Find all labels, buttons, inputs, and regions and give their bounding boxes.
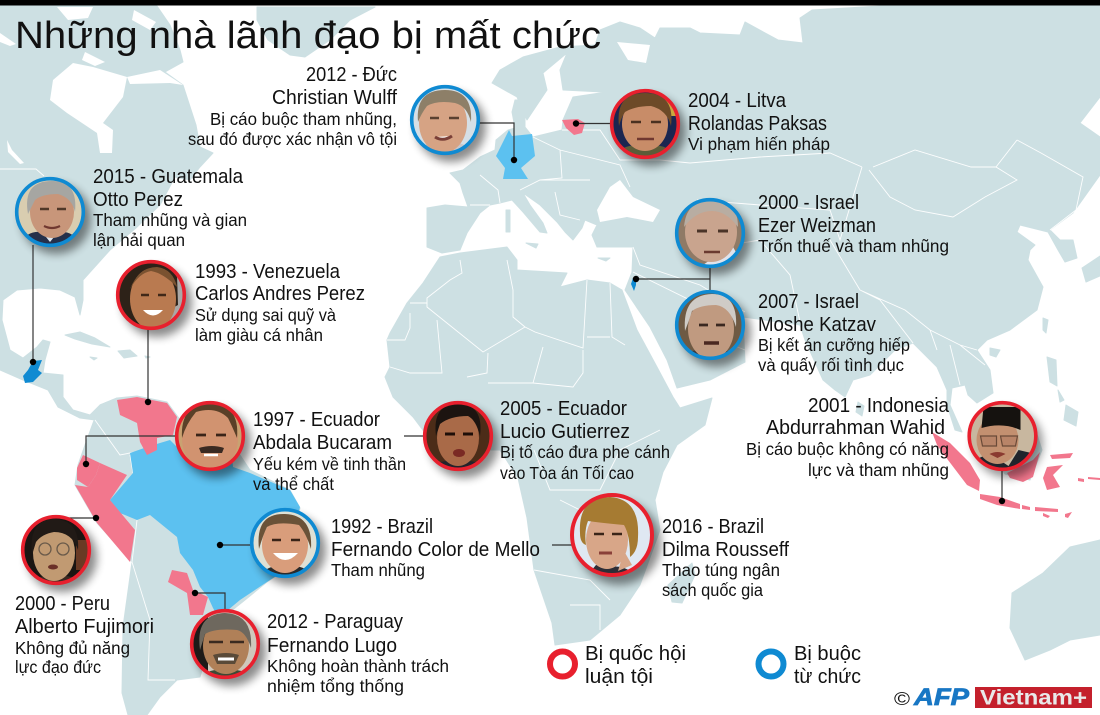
portrait xyxy=(175,401,251,478)
text: Katzav: Bị kết án cưỡng hiếp xyxy=(758,335,910,355)
connector xyxy=(573,120,612,127)
water: Arctic channels xyxy=(0,7,183,164)
profile text: Tham nhũng xyxy=(331,560,425,580)
text: Weizman: Trốn thuế và tham nhũng xyxy=(758,236,949,256)
land: Africa xyxy=(385,247,712,645)
land: Madagascar xyxy=(668,563,695,603)
text: Katzav: và quấy rối tình dục xyxy=(758,355,904,375)
profile text xyxy=(93,165,247,250)
text: Weizman: Ezer Weizman xyxy=(758,214,876,237)
portrait xyxy=(250,508,326,585)
country: Venezuela xyxy=(117,397,177,455)
profile text: 2005 - Ecuador xyxy=(500,397,627,420)
land: Mediterranean islands xyxy=(506,210,610,261)
profile: Abdurrahman Wahid xyxy=(746,394,1043,504)
profile text: 2012 - Paraguay xyxy=(267,610,404,633)
profile: Dilma Rousseff xyxy=(552,493,789,600)
profile text xyxy=(746,394,950,480)
connector xyxy=(145,327,151,405)
legend: forced to resign: Bị buộc xyxy=(794,642,861,665)
profile text: Abdurrahman Wahid xyxy=(766,416,945,439)
profile text: Không hoàn thành trách xyxy=(267,656,449,676)
connector xyxy=(404,435,425,437)
text: Weizman: 2000 - Israel xyxy=(758,191,859,214)
portrait xyxy=(190,609,266,686)
profile text: Bị cáo buộc tham nhũng, xyxy=(210,109,397,129)
profile text: 2015 - Guatemala xyxy=(93,165,244,188)
text: Katzav: 2007 - Israel xyxy=(758,290,859,313)
land: Australia xyxy=(1010,540,1100,660)
country: Israel xyxy=(631,278,636,291)
profile text: Không đủ năng xyxy=(15,638,130,658)
text: Katzav xyxy=(758,290,910,375)
legend: forced to resign: từ chức xyxy=(794,665,861,688)
AFP logo: AFP xyxy=(913,684,970,711)
water: Hudson Bay xyxy=(50,63,127,153)
profile text: Tham nhũng và gian xyxy=(93,210,247,230)
country: Ecuador xyxy=(77,455,100,487)
profile text: 2012 - Đức xyxy=(306,63,397,86)
legend: impeached: Bị quốc hội xyxy=(585,642,686,665)
profile text: và thể chất xyxy=(253,474,334,494)
profile text xyxy=(500,397,670,483)
profile: Ezer Weizman and Moshe Katzav xyxy=(633,191,949,375)
connector xyxy=(999,468,1005,504)
land: Asia Pacific islands xyxy=(856,256,1100,480)
connector xyxy=(633,266,710,292)
profile: Fernando Lugo xyxy=(190,590,449,696)
profile text: Bị tố cáo đưa phe cánh xyxy=(500,442,670,462)
land: Caribbean islands xyxy=(65,332,150,360)
profile text: nhiệm tổng thống xyxy=(267,676,404,696)
profile text: Abdala Bucaram xyxy=(253,431,392,454)
legend: impeached xyxy=(550,642,686,688)
profile text: Alberto Fujimori xyxy=(15,615,154,638)
legend xyxy=(550,642,861,688)
profile text: 2000 - Peru xyxy=(15,592,110,615)
profile text: Vi phạm hiến pháp xyxy=(688,134,830,154)
top bar xyxy=(0,0,1100,6)
legend: forced to resign xyxy=(758,642,861,688)
profile: Otto Perez xyxy=(15,165,247,365)
country: Germany xyxy=(496,130,535,179)
profile text: Carlos Andres Perez xyxy=(195,282,365,305)
connector xyxy=(83,436,178,467)
profile text: Otto Perez xyxy=(93,188,183,211)
profile: Rolandas Paksas xyxy=(573,89,830,166)
land: Eurasia xyxy=(427,6,1100,432)
connector xyxy=(192,590,225,611)
country borders xyxy=(0,130,1083,680)
portrait xyxy=(21,515,97,592)
connector xyxy=(217,542,253,548)
profile text: sách quốc gia xyxy=(662,580,763,600)
profile text xyxy=(267,610,449,696)
profile text xyxy=(188,63,397,149)
source credits xyxy=(894,684,1092,711)
portrait xyxy=(570,493,661,585)
portrait: Weizman xyxy=(675,198,751,275)
profile text: 2004 - Litva xyxy=(688,89,787,112)
country: Paraguay xyxy=(168,570,208,615)
profile: Carlos Andres Perez xyxy=(116,260,365,405)
profile text: lận hải quan xyxy=(93,230,185,250)
portrait: Katzav xyxy=(675,290,751,367)
country: Indonesia xyxy=(932,432,1100,518)
country: Peru xyxy=(75,463,135,562)
country: Brazil xyxy=(110,436,300,615)
portrait xyxy=(410,85,486,162)
text: Weizman xyxy=(758,191,949,256)
profile text xyxy=(15,592,154,677)
profile text: Sử dụng sai quỹ và xyxy=(195,305,336,325)
profile text: Bị cáo buộc không có năng xyxy=(746,439,949,459)
profile text: 2001 - Indonesia xyxy=(808,394,950,417)
portrait xyxy=(968,401,1043,478)
profile text: Lucio Gutierrez xyxy=(500,420,630,443)
title: Những nhà lãnh đạo bị mất chức xyxy=(15,15,601,57)
profile: Christian Wulff xyxy=(188,63,517,163)
land: North America xyxy=(0,6,213,420)
portrait xyxy=(610,89,686,166)
profile text: Rolandas Paksas xyxy=(688,112,827,135)
profile text xyxy=(688,89,830,154)
Vietnam+ logo: Vietnam+ xyxy=(980,686,1087,710)
land: South America xyxy=(75,396,300,715)
profile text: Thao túng ngân xyxy=(662,560,780,580)
connector xyxy=(478,123,517,163)
land: Greenland xyxy=(257,7,375,57)
connector xyxy=(68,515,99,521)
profile text: Yếu kém về tinh thần xyxy=(253,454,406,474)
profile text: 2016 - Brazil xyxy=(662,515,764,538)
profile text xyxy=(662,515,789,600)
profile: Lucio Gutierrez xyxy=(404,397,670,483)
profile text: 1993 - Venezuela xyxy=(195,260,341,283)
profile text: làm giàu cá nhân xyxy=(195,325,323,345)
text: Katzav: Moshe Katzav xyxy=(758,313,877,336)
profile text: lực đạo đức xyxy=(15,657,101,677)
profile text xyxy=(195,260,365,345)
profile text: 1992 - Brazil xyxy=(331,515,433,538)
profile text: sau đó được xác nhận vô tội xyxy=(188,129,397,149)
portrait xyxy=(423,401,499,478)
profile text: Dilma Rousseff xyxy=(662,538,789,561)
water: White Sea and Black Sea xyxy=(597,42,660,222)
connector xyxy=(30,245,36,365)
country: Guatemala xyxy=(23,360,42,383)
profile text: lực và tham nhũng xyxy=(808,460,949,480)
copyright mark: © xyxy=(894,689,910,709)
profile text: Fernando Color de Mello xyxy=(331,538,540,561)
profile text xyxy=(331,515,540,580)
profile: Fernando Color de Mello xyxy=(217,508,540,585)
legend: impeached: luận tội xyxy=(585,665,653,688)
profile text: Christian Wulff xyxy=(272,86,397,109)
connector xyxy=(552,544,572,546)
country: Lithuania xyxy=(562,119,585,135)
profile: Alberto Fujimori xyxy=(15,515,154,677)
portrait xyxy=(15,177,91,254)
profile text: vào Tòa án Tối cao xyxy=(500,463,634,483)
profile text: Fernando Lugo xyxy=(267,634,397,657)
profile text: 1997 - Ecuador xyxy=(253,408,380,431)
profile text xyxy=(253,408,406,494)
profile: Abdala Bucaram xyxy=(83,401,406,494)
portrait xyxy=(116,260,192,337)
